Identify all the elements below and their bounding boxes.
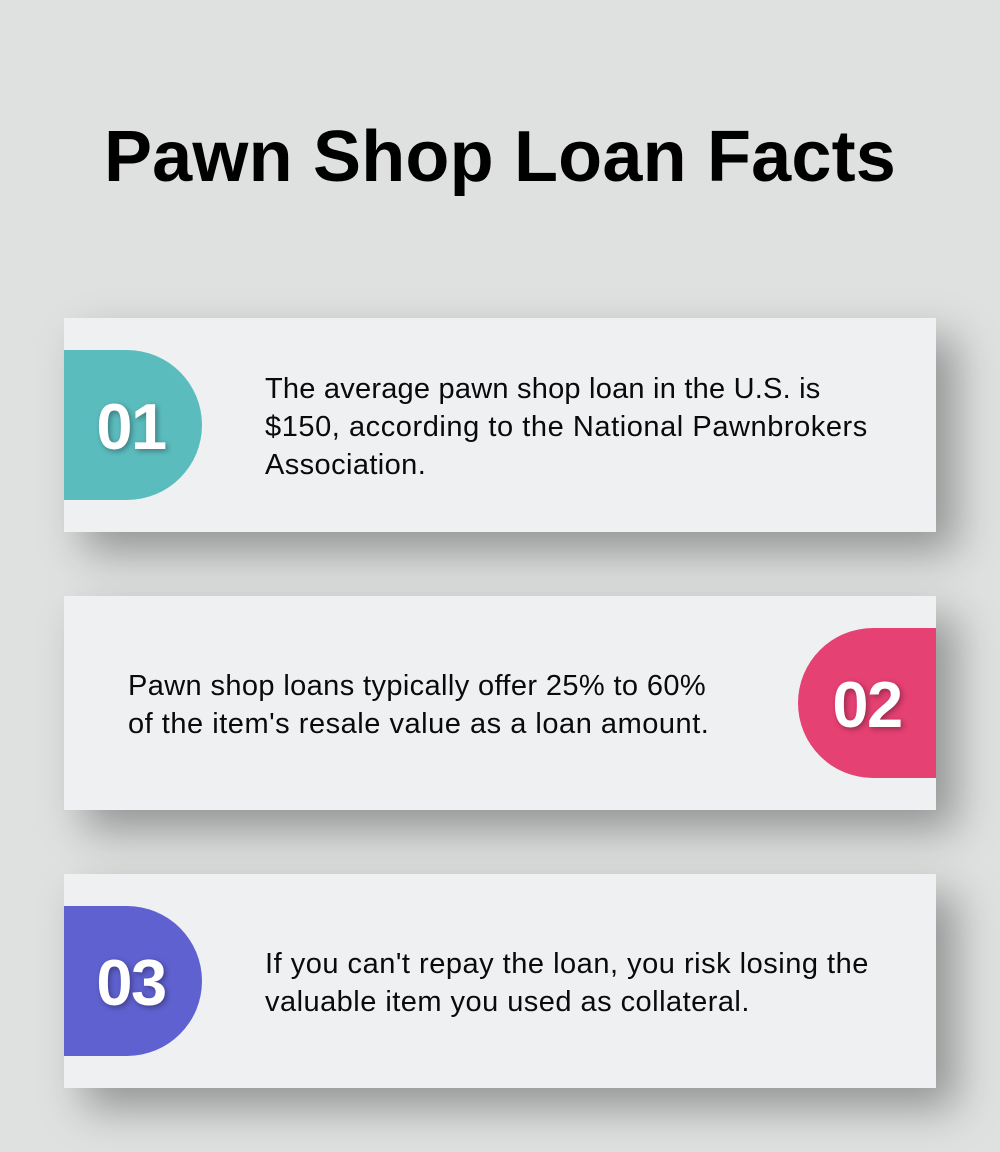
text: fact 01 — [265, 373, 868, 481]
text: fact 02: Pawn shop loans typically offer 25% to 60% — [128, 670, 706, 702]
panel: fact 02 — [64, 596, 936, 810]
panel: fact 01 — [64, 318, 936, 532]
text: fact 01: Association. — [265, 449, 426, 481]
title: Pawn Shop Loan Facts — [104, 117, 896, 197]
text: fact 01: The average pawn shop loan in the U.S. is — [265, 373, 821, 405]
badge: 02: 02 — [832, 668, 902, 741]
text: fact 02 — [128, 670, 709, 740]
text: fact 03: valuable item you used as collateral. — [265, 986, 750, 1018]
text: fact 02: of the item's resale value as a loan amount. — [128, 708, 709, 740]
badge: 01 — [64, 350, 202, 500]
badge: 03: 03 — [96, 946, 166, 1019]
text: fact 01: $150, according to the National Pawnbrokers — [265, 411, 868, 443]
badge: 03 — [64, 906, 202, 1056]
panel: fact 03 — [64, 874, 936, 1088]
text: fact 03: If you can't repay the loan, you risk losing the — [265, 948, 869, 980]
badge: 02 — [798, 628, 936, 778]
text: fact 03 — [265, 948, 869, 1018]
badge: 01: 01 — [96, 390, 166, 463]
